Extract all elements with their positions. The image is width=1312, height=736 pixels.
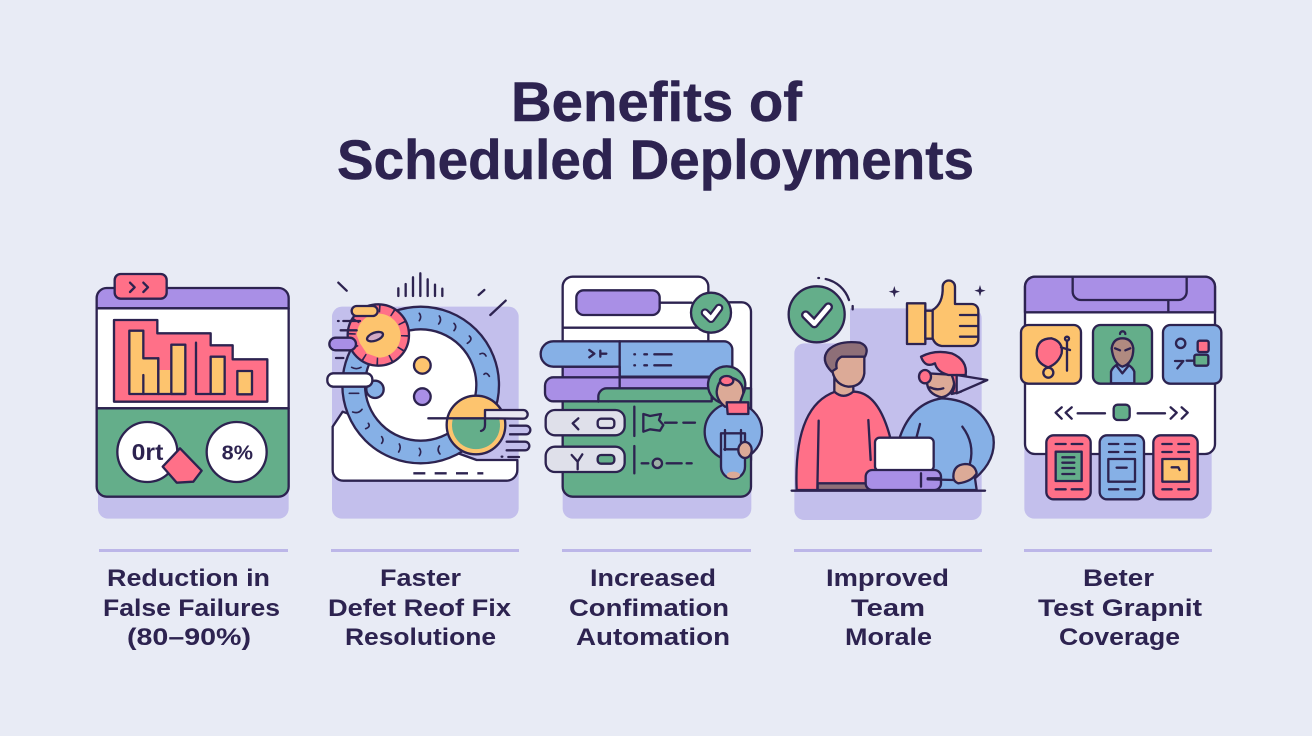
icon: automation window with person	[541, 277, 762, 519]
divider	[99, 549, 288, 552]
label: Coverage	[1059, 624, 1180, 651]
label: Reduction in	[107, 565, 270, 592]
divider	[1024, 549, 1212, 552]
panel: faster defect fix resolution	[327, 273, 530, 651]
label	[1038, 565, 1202, 651]
label: Team	[851, 595, 925, 622]
label: Confimation	[569, 595, 729, 622]
icon: two teammates with thumbs up	[789, 278, 994, 520]
label: Morale	[845, 624, 932, 651]
label: Resolutione	[345, 624, 496, 651]
title	[337, 70, 974, 191]
label: Beter	[1083, 565, 1154, 592]
label	[328, 565, 512, 651]
icon: circular ring with gears	[327, 273, 530, 519]
icon: dashboard window with bar chart: 8%	[222, 441, 253, 464]
label: Faster	[380, 565, 461, 592]
label: (80–90%)	[127, 624, 251, 651]
icon: dashboard window with bar chart	[97, 274, 289, 519]
label	[103, 565, 280, 651]
icon: dashboard window with bar chart: 0rt	[132, 439, 164, 465]
panel: increased confirmation automation	[541, 277, 762, 651]
panel: better test coverage	[1021, 277, 1221, 651]
label: False Failures	[103, 595, 280, 622]
divider	[794, 549, 982, 552]
label: Test Grapnit	[1038, 595, 1202, 622]
label: Defet Reof Fix	[328, 595, 512, 622]
label: Improved	[826, 565, 949, 592]
title: Scheduled Deployments	[337, 128, 974, 191]
label	[569, 565, 730, 651]
title: Benefits of	[511, 70, 802, 133]
icon: test coverage window with cards	[1021, 277, 1221, 519]
label	[826, 565, 949, 651]
divider	[331, 549, 519, 552]
panel: reduction in false failures	[97, 274, 289, 651]
panel: improved team morale	[789, 278, 994, 651]
divider	[562, 549, 751, 552]
label: Increased	[590, 565, 716, 592]
label: Automation	[576, 624, 730, 651]
